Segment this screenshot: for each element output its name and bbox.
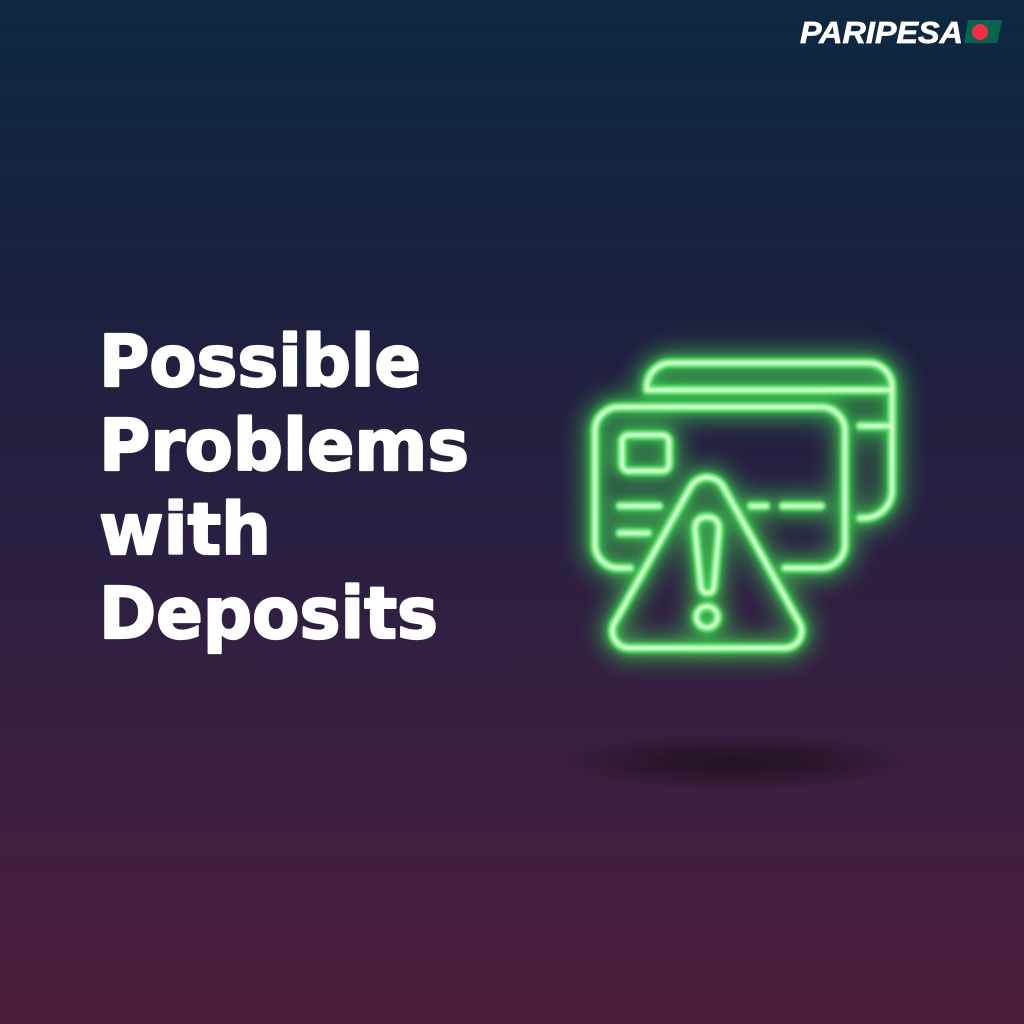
title: Deposits (99, 572, 438, 655)
icon: neon credit cards with warning triangle (595, 363, 892, 648)
flag field (964, 20, 1002, 43)
flag disc (972, 24, 988, 40)
title (99, 320, 469, 655)
logo wordmark: PARIPESA (800, 15, 963, 50)
title: with (99, 488, 271, 571)
floor shadow (560, 734, 910, 790)
logo: Paripesa with Bangladesh flag (800, 15, 1002, 50)
title: Problems (99, 404, 469, 487)
title: Possible (99, 320, 421, 403)
